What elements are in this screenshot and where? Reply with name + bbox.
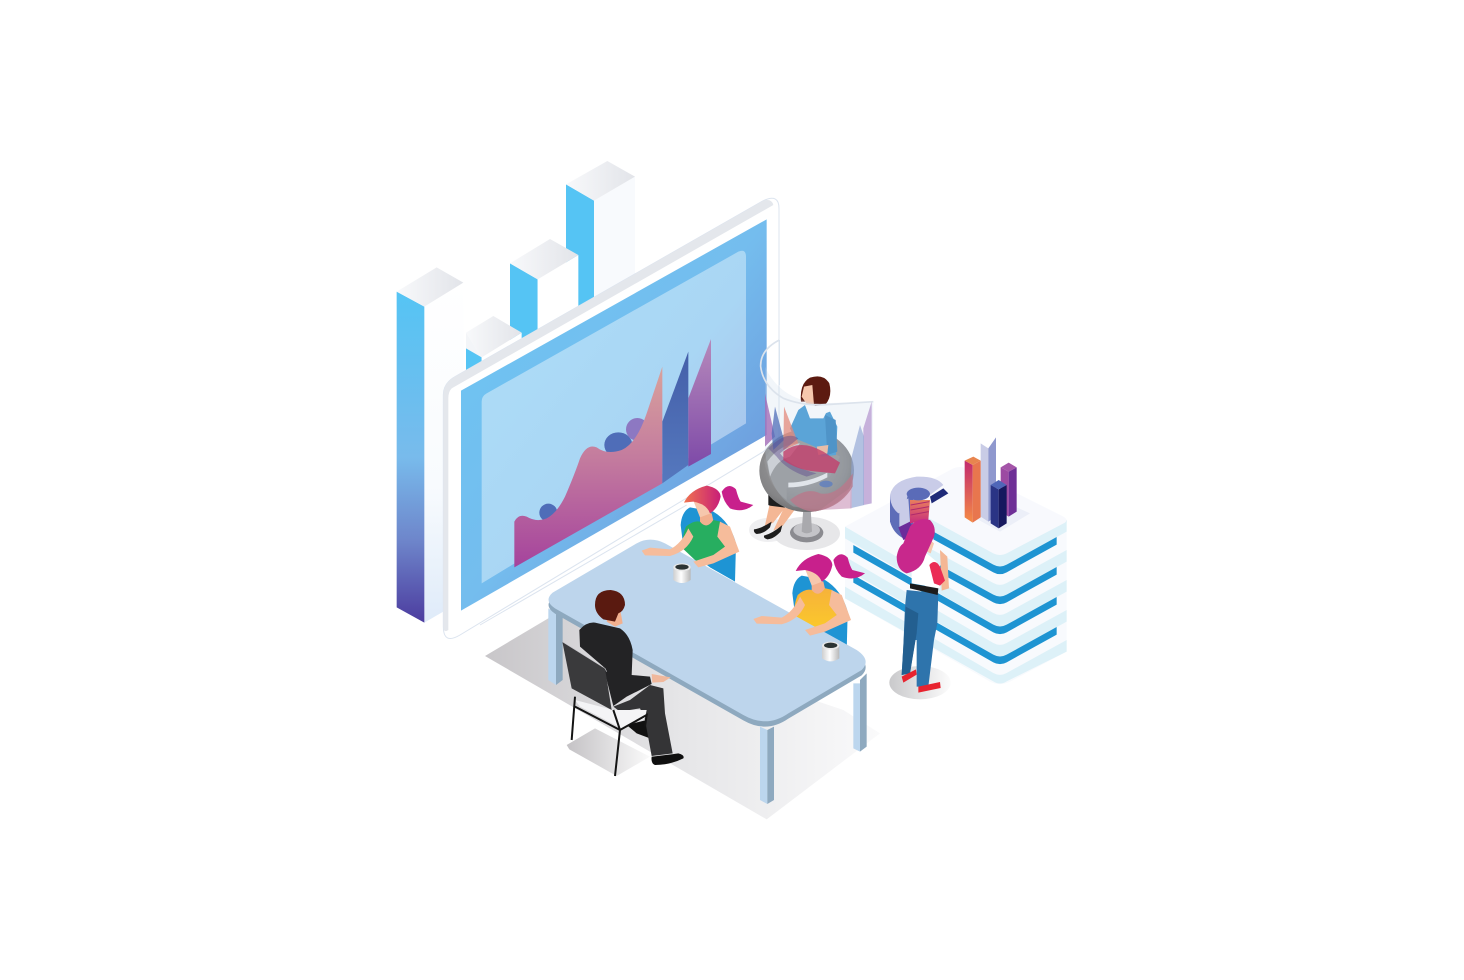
plate bands: [845, 517, 1067, 683]
torso: [682, 520, 725, 562]
hair and face: [684, 486, 753, 517]
floor shadow: [889, 666, 951, 699]
jacket: [579, 623, 652, 706]
shoe: [651, 753, 684, 765]
top and belt: [910, 553, 940, 595]
arms of yellow top woman: [753, 590, 851, 636]
cup near back woman: [673, 563, 691, 583]
torso: [794, 588, 837, 630]
trousers: [613, 685, 673, 756]
seated woman in ball chair with hologram: [749, 340, 873, 550]
short column: [466, 316, 522, 383]
arm: [929, 550, 949, 591]
server stack with charts: [845, 437, 1067, 684]
floor shadows: [749, 517, 840, 550]
area chart: pink wave: [514, 367, 662, 567]
hand: [652, 674, 671, 683]
neck: [812, 580, 826, 599]
mini column chart: [965, 437, 1017, 528]
stack silhouette: [845, 467, 1067, 684]
neck: [700, 512, 714, 531]
hair: [897, 519, 935, 573]
green top woman seated at back of table: [681, 486, 753, 582]
hologram spikes: [765, 393, 872, 512]
chart spike: purple: [688, 339, 711, 467]
floor shadow under table: [485, 613, 880, 819]
screen: [461, 219, 767, 611]
screen inner panel: [482, 251, 746, 583]
table edge: [549, 545, 866, 727]
bottom line of monitor frame: [480, 505, 687, 625]
standing woman with pink hair: [889, 519, 951, 699]
chair shadow: [567, 728, 650, 776]
monitor with area chart: [443, 198, 779, 639]
legs and shoes: [754, 493, 795, 539]
chart bumps: [539, 418, 649, 522]
shoes: [902, 669, 941, 693]
jeans: [902, 590, 938, 687]
hair and face: [796, 554, 865, 586]
top plate: [845, 467, 1066, 555]
chair: [681, 507, 736, 582]
meeting table: [548, 540, 867, 804]
man in black suit on chair: [562, 590, 684, 776]
head: [595, 590, 625, 627]
mid column: [510, 239, 578, 350]
cup near side woman: [822, 642, 839, 661]
blue strips: [853, 532, 1057, 664]
monitor rim: [443, 200, 773, 631]
woman torso and head: [790, 376, 837, 457]
bar shadow on top plate: [967, 497, 1030, 532]
chair back: [562, 642, 612, 710]
tall back column: [566, 161, 635, 317]
table top: [549, 540, 866, 721]
ball chair: [759, 429, 854, 512]
arms of green top woman: [642, 522, 739, 567]
chair: [792, 576, 848, 650]
tall front column: [397, 267, 463, 623]
chair seat and legs: [572, 697, 647, 776]
chair pedestal: [790, 508, 823, 542]
3D pie chart: [890, 477, 948, 540]
table legs: [548, 608, 867, 804]
coffee cups: [673, 563, 839, 661]
chart spike: blue: [662, 352, 688, 483]
hologram glass screen: [761, 340, 873, 509]
monitor frame: [443, 198, 779, 639]
bar chart: 3D columns behind monitor: [397, 161, 635, 623]
yellow top woman seated at side of table: [792, 554, 865, 650]
far shoe and leg: [627, 720, 650, 738]
